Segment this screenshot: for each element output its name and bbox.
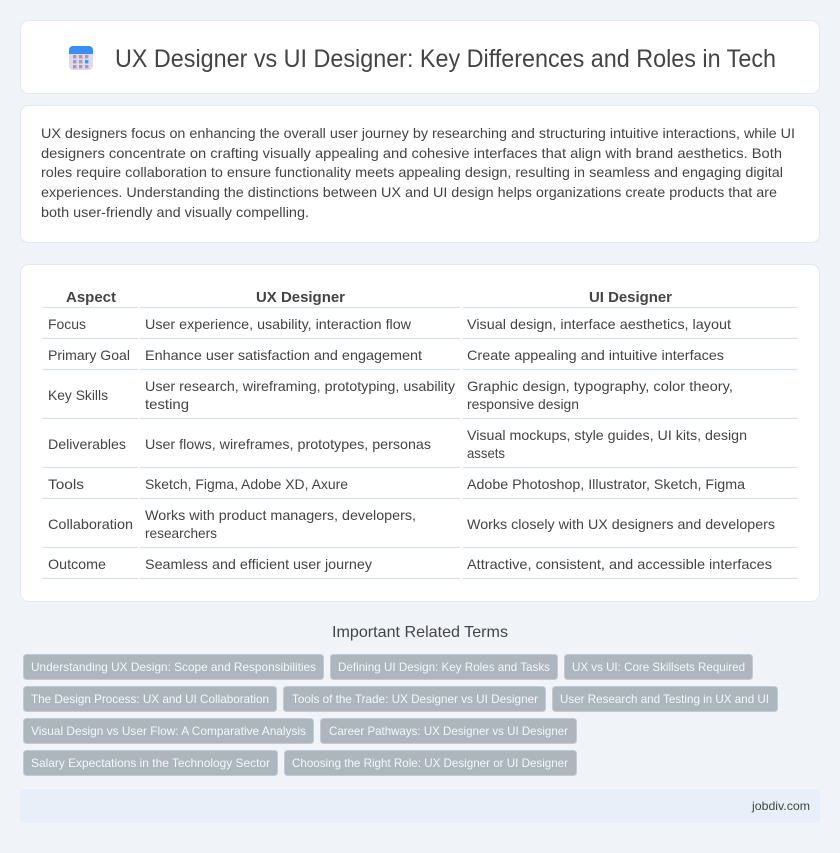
row: key skills: responsive design <box>467 396 579 412</box>
footer text: jobdiv.com <box>751 799 810 813</box>
table header: UX Designer <box>256 289 345 306</box>
row: focus: Visual design, interface aesthetics, layout <box>467 316 731 332</box>
tag: Defining UI Design: Key Roles and Tasks <box>338 660 550 674</box>
row: collaboration: Works closely with UX designers and developers <box>467 516 775 532</box>
row: outcome: Attractive, consistent, and accessible interfaces <box>467 556 772 572</box>
row: outcome <box>48 556 772 572</box>
row: tools: Sketch, Figma, Adobe XD, Axure <box>145 476 348 492</box>
row: deliverables: assets <box>467 445 505 461</box>
tag group: related terms <box>24 654 778 776</box>
row: outcome: Outcome <box>48 556 106 572</box>
table header: Aspect <box>66 289 116 306</box>
tag <box>24 686 276 712</box>
tag <box>24 718 314 744</box>
row: key skills: User research, wireframing, prototyping, usability <box>145 378 455 394</box>
row: deliverables: Visual mockups, style guides, UI kits, design <box>467 427 747 443</box>
footer bar <box>20 789 820 823</box>
tag <box>284 750 576 776</box>
text block: introduction: roles require collaboration to ensure functionality meets appealing design, resulting in seamless and engaging digital <box>41 164 783 180</box>
row: key skills: Key Skills <box>48 387 108 403</box>
text block: introduction: both user-friendly and visually compelling. <box>41 204 309 220</box>
row: focus: Focus <box>48 316 86 332</box>
tag: Career Pathways: UX Designer vs UI Designer <box>329 724 568 738</box>
row: deliverables: Deliverables <box>48 436 126 452</box>
tag <box>24 654 324 680</box>
heading: important related terms: Important Related Terms <box>332 624 508 641</box>
row: tools: Tools <box>48 476 84 492</box>
tag <box>564 654 752 680</box>
row: outcome: Seamless and efficient user journey <box>145 556 372 572</box>
row: focus: User experience, usability, interaction flow <box>145 316 412 332</box>
text block: introduction: experiences. Understanding the distinctions between UX and UI design helps organizations create products that are <box>41 184 777 200</box>
tag: Tools of the Trade: UX Designer vs UI Designer <box>292 692 538 706</box>
row: primary goal: Enhance user satisfaction and engagement <box>145 347 422 363</box>
row: key skills: Graphic design, typography, color theory, <box>467 378 733 394</box>
tag: Choosing the Right Role: UX Designer or UI Designer <box>292 756 568 770</box>
tag: User Research and Testing in UX and UI <box>560 692 769 706</box>
row: collaboration <box>48 507 775 541</box>
row: collaboration: researchers <box>145 525 217 541</box>
row: tools <box>48 476 745 492</box>
tag: Visual Design vs User Flow: A Comparative Analysis <box>31 724 306 738</box>
tag: Understanding UX Design: Scope and Responsibilities <box>31 660 316 674</box>
row: key skills <box>48 378 733 412</box>
row: deliverables <box>48 427 747 461</box>
tag <box>320 718 576 744</box>
icon: calendar <box>69 46 93 70</box>
tag: The Design Process: UX and UI Collaboration <box>31 692 269 706</box>
row: focus <box>48 316 731 332</box>
tag: UX vs UI: Core Skillsets Required <box>572 660 745 674</box>
row: primary goal: Primary Goal <box>48 347 130 363</box>
panel: header <box>20 20 820 94</box>
row: primary goal <box>48 347 724 363</box>
row: key skills: testing <box>145 396 189 412</box>
panel: introduction <box>20 106 820 242</box>
tag <box>330 654 558 680</box>
title: UX Designer vs UI Designer: Key Differences and Roles in Tech <box>115 45 776 73</box>
row: deliverables: User flows, wireframes, prototypes, personas <box>145 436 431 452</box>
tag <box>24 750 278 776</box>
tag: Salary Expectations in the Technology Sector <box>31 756 270 770</box>
text block: introduction: UX designers focus on enhancing the overall user journey by researching and structuring intuitive interactions, while UI <box>41 125 795 141</box>
row: tools: Adobe Photoshop, Illustrator, Sketch, Figma <box>467 476 745 492</box>
panel: comparison table <box>20 264 820 602</box>
text block: introduction <box>41 125 795 220</box>
tag <box>552 686 778 712</box>
text block: introduction: designers concentrate on crafting visually appealing and cohesive interfaces that align with brand aesthetics. Both <box>41 145 782 161</box>
tag <box>284 686 546 712</box>
row: collaboration: Works with product managers, developers, <box>145 507 416 523</box>
row: collaboration: Collaboration <box>48 516 133 532</box>
table header <box>66 289 672 306</box>
table header: UI Designer <box>589 289 672 306</box>
row: primary goal: Create appealing and intuitive interfaces <box>467 347 724 363</box>
